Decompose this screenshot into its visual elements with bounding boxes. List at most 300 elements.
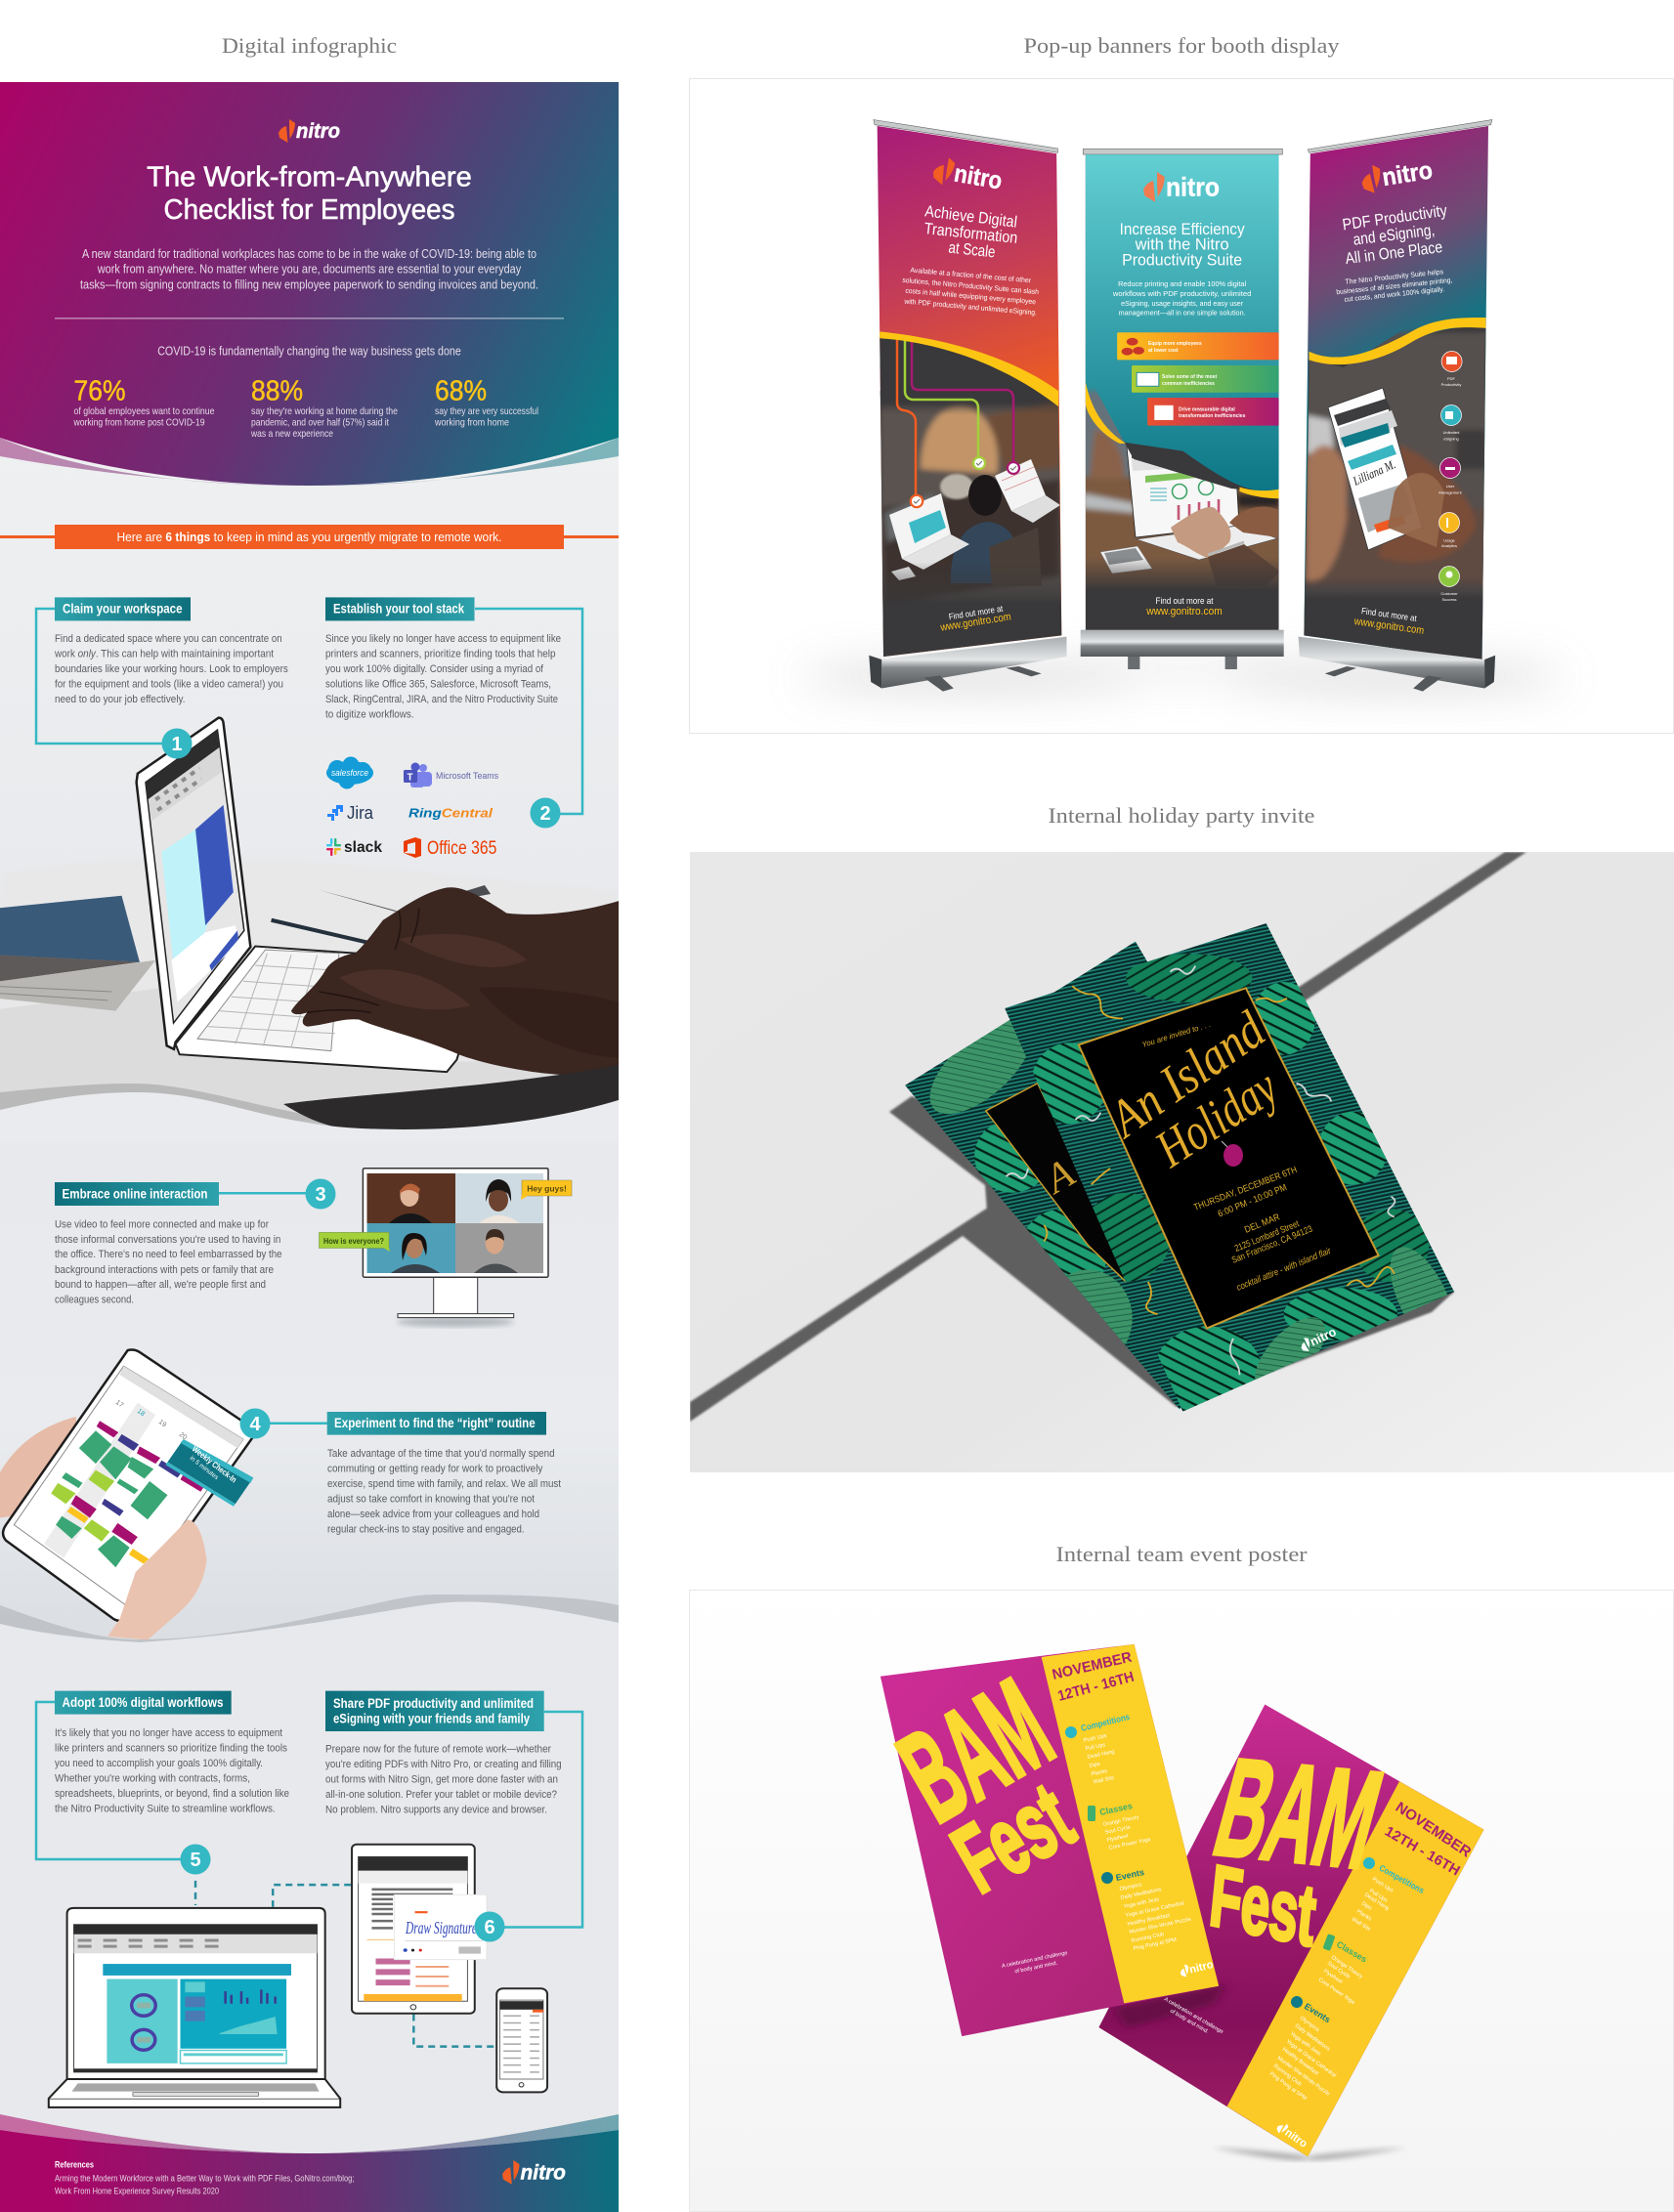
orange banner: [0, 525, 619, 549]
body: cut costs, and work 100% digitally.: [1344, 284, 1444, 304]
icon labels: PDF: [1447, 376, 1456, 381]
left banner text: [902, 155, 1039, 634]
back poster title: BAM: [1201, 1729, 1395, 1897]
body: The Nitro Productivity Suite helps: [1345, 267, 1444, 286]
title: and eSigning,: [1352, 222, 1436, 249]
body text: Prepare now for the future of remote work—whether: [325, 1743, 551, 1755]
heading: pop-up banners: Pop-up banners for booth display: [1024, 33, 1339, 58]
back poster title: Fest: [1206, 1847, 1320, 1964]
invite cards: [874, 917, 1469, 1427]
signature text: Draw Signature: [405, 1918, 477, 1937]
step 6: share pdf productivity: eSigning with your friends and family: [333, 1712, 530, 1726]
intro paragraph: tasks—from signing contracts to filling new employee paperwork to sending invoices and beyond.: [80, 276, 538, 291]
calendar day numbers: 17: [114, 1399, 124, 1409]
front poster lists: Competitions: [1080, 1712, 1131, 1733]
front poster lists: Daily Meditations: [1120, 1887, 1162, 1901]
front poster lists: Events: [1115, 1867, 1145, 1883]
body text: all-in-one solution. Prefer your tablet or mobile device?: [325, 1789, 557, 1801]
body text: like printers and scanners so prioritize finding the tools: [55, 1742, 287, 1754]
device illustrations: [49, 1845, 547, 2107]
body text: printers and scanners, prioritize finding tools that help: [325, 649, 556, 660]
body text: to digitize workflows.: [325, 709, 414, 721]
logo: nitro: [1188, 1959, 1215, 1977]
body: eSigning, usage insights, and easy user: [1121, 299, 1244, 308]
title: [147, 162, 472, 226]
stats subtitle: COVID-19 is fundamentally changing the way business gets done: [157, 344, 461, 358]
front poster lists: Push Ups: [1083, 1733, 1107, 1744]
middle banner: [1080, 149, 1285, 669]
phone: [496, 1988, 547, 2092]
event details: cocktail attire - with island flair: [1235, 1246, 1333, 1294]
body text: you work 100% digitally. Consider using a myriad of: [325, 663, 543, 675]
front poster lists: Running Club: [1131, 1932, 1165, 1944]
left banner laptops: [889, 459, 1060, 580]
icon labels: Analytics: [1441, 543, 1457, 548]
logo: nitro: nitro: [296, 120, 340, 143]
call to action: Find out more at: [1155, 596, 1214, 607]
poster category icons: [1065, 1726, 1375, 2008]
title: with the Nitro: [1135, 235, 1229, 254]
body text: Slack, RingCentral, JIRA, and the Nitro Productivity Suite: [325, 694, 558, 705]
stat: 76%: of global employees want to continue: [74, 406, 215, 417]
step 2: establish your tool stack: Establish your tool stack: [333, 602, 464, 616]
title: Checklist for Employees: [164, 194, 455, 226]
poster shapes: [880, 1644, 1483, 2156]
wave: lower section band: [0, 1595, 619, 1642]
back poster lists: Core Power Yoga: [1317, 1978, 1356, 2007]
logo: slack: [326, 838, 382, 856]
icon labels: Usage: [1443, 538, 1456, 543]
icon labels: Customer: [1440, 591, 1458, 596]
front poster lists: Dead Hang: [1087, 1749, 1115, 1761]
call to action: www.gonitro.com: [939, 611, 1012, 634]
logo: jira: Jira: [347, 803, 374, 823]
logo: nitro: [279, 119, 340, 143]
back poster lists: Yoga at Grace Cathedral: [1285, 2039, 1337, 2079]
calendar day numbers: 19: [157, 1419, 167, 1428]
stat: 76%: working from home post COVID-19: [73, 418, 205, 428]
body: [1112, 279, 1251, 317]
back poster lists: Olympics: [1299, 2016, 1320, 2033]
step 3: embrace online interaction: 3: [315, 1184, 326, 1206]
icon labels: Management: [1438, 490, 1463, 495]
front poster lists: Dips: [1089, 1762, 1101, 1769]
panel: digital infographic: [0, 82, 619, 2212]
stat: 76%: 76%: [74, 375, 125, 406]
tablet: [352, 1845, 475, 2014]
front poster lists: Ping Pong at 5PM: [1133, 1937, 1178, 1952]
hands: [291, 887, 619, 1076]
panel: pop-up banners: [690, 78, 1673, 733]
step 4: experiment to find the right routine: Experiment to find the “right” routine: [334, 1416, 536, 1430]
logo: jira: [327, 803, 374, 823]
back poster: [1098, 1704, 1483, 2156]
body text: the office. There's no need to feel embarrassed by the: [55, 1249, 282, 1260]
front poster title: Fest: [936, 1762, 1090, 1913]
stat: 88%: pandemic, and over half (57%) said it: [251, 418, 389, 428]
dashed connectors: [195, 1881, 494, 2047]
back poster lists: Dips: [1360, 1901, 1373, 1912]
logo: microsoft teams: Microsoft Teams: [436, 771, 498, 782]
badge 5: [180, 1845, 211, 1874]
feature labels: [1148, 341, 1246, 419]
body: businesses of all sizes eliminate printing,: [1336, 276, 1453, 296]
back poster lists: Planks: [1355, 1909, 1373, 1923]
phone signature: Lilliana M.: [1350, 456, 1397, 489]
front poster lists: Core Power Yoga: [1108, 1837, 1152, 1851]
stat: 68%: [435, 380, 537, 428]
middle banner laptop: [1127, 440, 1277, 560]
body text: bound to happen—after all, we're people first and: [55, 1279, 266, 1291]
body: [902, 266, 1039, 317]
hero swoosh: [0, 438, 619, 486]
logo: salesforce: salesforce: [331, 768, 368, 778]
body text: [54, 633, 288, 705]
logo: nitro: [502, 2160, 566, 2185]
body text: boundaries like your working hours. Look to employers: [55, 663, 288, 675]
wave: dark swoosh: [283, 1065, 619, 1130]
body text: [55, 1218, 282, 1306]
back poster lists: Healthy Breakfast: [1281, 2047, 1319, 2077]
title: at Scale: [948, 239, 996, 261]
body: Available at a fraction of the cost of other: [910, 266, 1032, 284]
front poster lists: Wall Sits: [1093, 1775, 1115, 1785]
script title: Holiday: [1144, 1057, 1288, 1178]
call to action: www.gonitro.com: [1352, 616, 1425, 637]
speech bubble: hey guys: [521, 1180, 572, 1200]
logo: nitro: [952, 160, 1005, 195]
signature popup: [394, 1894, 487, 1960]
back poster details: 12TH - 16TH: [1382, 1824, 1462, 1879]
intro paragraph: work from anywhere. No matter where you are, documents are essential to your everyday: [97, 262, 522, 276]
middle banner tablet: [1100, 546, 1152, 574]
front poster lists: Yoga at Grace Cathedral: [1125, 1900, 1184, 1919]
logo: salesforce: [326, 756, 373, 789]
badge 5: 5: [190, 1850, 201, 1871]
body text: for the equipment and tools (like a video camera!) you: [55, 679, 283, 691]
badge 6: 6: [484, 1917, 495, 1938]
footer swoosh: [0, 2114, 619, 2153]
panel background: [0, 438, 619, 1642]
back poster lists: Pull Ups: [1368, 1889, 1389, 1904]
badge 6: [475, 1911, 504, 1942]
body text: commuting or getting ready for work to proactively: [327, 1463, 543, 1474]
body text: [55, 1727, 289, 1814]
body text: regular check-ins to stay positive and engaged.: [327, 1524, 525, 1536]
body text: spreadsheets, blueprints, or beyond, find a solution like: [55, 1788, 289, 1800]
back poster lists: [1163, 1863, 1426, 2150]
feature labels: common inefficiencies: [1162, 381, 1215, 387]
calendar events: [51, 1421, 204, 1567]
front poster lists: Flywheel: [1106, 1833, 1129, 1844]
back poster lists: Yoga with Jess: [1289, 2031, 1322, 2058]
left banner: [869, 120, 1066, 692]
front poster lists: Olympics: [1119, 1882, 1142, 1893]
back poster lists: Events: [1303, 2001, 1332, 2024]
body: solutions, the Nitro Productivity Suite can slash: [902, 276, 1039, 296]
body text: out forms with Nitro Sign, get more done faster with an: [325, 1774, 558, 1786]
video tiles: [367, 1173, 543, 1273]
body: with PDF productivity and unlimited eSigning.: [903, 297, 1037, 317]
section background: [0, 1092, 619, 1131]
back poster lists: Ping Pong at 5PM: [1268, 2071, 1308, 2102]
logo: nitro: [1166, 172, 1220, 201]
popup panel: [165, 1439, 253, 1507]
body text: you need to accomplish your goals 100% digitally.: [55, 1758, 263, 1769]
stat: 88%: [250, 375, 398, 440]
body: workflows with PDF productivity, unlimited: [1112, 289, 1251, 298]
left banner photo: [875, 339, 1065, 659]
front poster lists: of body and mind.: [1014, 1961, 1058, 1975]
body text: No problem. Nitro supports any device and browser.: [325, 1804, 547, 1815]
front poster lists: Murder-She-Wrote Puzzle: [1129, 1917, 1192, 1936]
back poster lists: Dead Hang: [1363, 1893, 1390, 1912]
script fragment on back card: A: [1035, 1151, 1083, 1204]
body text: work only. This can help with maintaining important: [54, 649, 274, 660]
body: management—all in one simple solution.: [1119, 309, 1246, 317]
front poster shadow: [1113, 1984, 1227, 2028]
front poster details: [1051, 1649, 1136, 1705]
back poster lists: Daily Meditations: [1294, 2023, 1331, 2053]
front poster lists: Soul Cycle: [1104, 1825, 1132, 1836]
icon labels: Success: [1441, 597, 1457, 602]
body text: the Nitro Productivity Suite to streamline workflows.: [55, 1803, 276, 1814]
icon labels: eSigning: [1443, 437, 1459, 442]
feature labels: transformation inefficiencies: [1179, 413, 1246, 419]
front poster lists: A celebration and challenge: [1002, 1950, 1068, 1970]
back poster lists: Wall Sits: [1351, 1917, 1372, 1933]
title: Increase Efficiency: [1120, 220, 1245, 238]
logo: ringcentral: Ring Central: [408, 805, 493, 820]
back poster lists: Murder-She-Wrote Puzzle: [1276, 2056, 1331, 2098]
front poster lists: [1002, 1712, 1215, 1978]
ornament: [1222, 1141, 1243, 1167]
step 5: adopt 100% digital workflows: Adopt 100% digital workflows: [63, 1695, 223, 1710]
title: [1120, 220, 1245, 270]
back poster title: [1201, 1729, 1395, 1964]
logo: microsoft teams: T: [407, 772, 413, 784]
title: Transformation: [923, 220, 1018, 247]
right hand and pen: [107, 1519, 206, 1640]
logo: nitro: [1308, 1324, 1339, 1349]
right banner: [1299, 120, 1495, 692]
tablet with calendar held in hands: [0, 1350, 254, 1640]
heading: digital infographic: Digital infographic: [222, 33, 397, 58]
feature labels: Drive measurable digital: [1179, 406, 1235, 412]
panel: team event poster: [690, 1591, 1673, 2212]
speech bubble: how is everyone: How is everyone?: [323, 1236, 384, 1246]
body: [1336, 267, 1453, 304]
step 3: embrace online interaction: Embrace online interaction: [63, 1186, 207, 1202]
stat: 88%: say they're working at home during the: [251, 406, 398, 417]
panel: holiday party invite: [690, 852, 1674, 1472]
pencil: [272, 920, 369, 943]
middle banner photo: [1080, 391, 1285, 636]
speech bubble: hey guys: Hey guys!: [527, 1184, 567, 1194]
footer: [0, 2130, 619, 2212]
feature labels: at lower cost: [1148, 348, 1179, 354]
icon labels: Productivity: [1441, 382, 1461, 387]
body text: [325, 633, 561, 721]
step 6: share pdf productivity: [325, 1691, 582, 1927]
stat: 68%: working from home: [434, 418, 509, 428]
intro paragraph: A new standard for traditional workplaces has come to be in the wake of COVID-19: being able to: [82, 246, 537, 261]
intro paragraph: [80, 246, 538, 291]
popup text: Weekly Check-In: [191, 1444, 238, 1484]
popup text: [189, 1444, 238, 1484]
back poster details: [1382, 1799, 1474, 1879]
call to action: Find out more at: [948, 604, 1004, 621]
body: Reduce printing and enable 100% digital: [1118, 279, 1246, 288]
title: [1342, 202, 1449, 268]
feature labels: Equip more employees: [1148, 341, 1202, 347]
photo: desk with hands typing on laptop: [0, 718, 619, 1121]
body text: colleagues second.: [55, 1295, 134, 1306]
icon labels: User: [1446, 484, 1455, 489]
logo: office 365: Office 365: [427, 838, 496, 859]
front poster title: [878, 1652, 1090, 1913]
heading: holiday party invite: Internal holiday party invite: [1048, 803, 1315, 828]
stat: 76%: [74, 380, 215, 428]
body: costs in half while equipping every employee: [905, 286, 1036, 306]
shadow strips: [690, 852, 1526, 1422]
back poster lists: Competitions: [1378, 1863, 1426, 1895]
logo: [1143, 172, 1220, 202]
front poster lists: Planks: [1091, 1768, 1108, 1777]
references: [55, 2160, 354, 2196]
left banner connector lines: [897, 339, 1013, 495]
middle banner text: [1112, 172, 1251, 617]
event details: San Francisco, CA 94123: [1230, 1224, 1314, 1266]
laptop: [49, 1908, 340, 2107]
popup text: in 5 minutes: [189, 1455, 220, 1482]
logo: nitro: [1282, 2127, 1309, 2150]
monitor with video call: [319, 1169, 572, 1327]
invite text: You are invited to . . .: [1141, 1020, 1212, 1049]
back poster lists: of body and mind.: [1169, 2009, 1210, 2035]
call to action: www.gonitro.com: [1145, 606, 1223, 617]
stat: 68%: 68%: [435, 375, 487, 406]
body text: need to do your job effectively.: [55, 694, 186, 705]
event details: [1192, 1165, 1333, 1294]
feature labels: Solve some of the most: [1162, 374, 1217, 380]
body text: Take advantage of the time that you'd normally spend: [327, 1448, 555, 1460]
event details: DEL MAR: [1243, 1212, 1281, 1236]
invite text: [1035, 1000, 1339, 1353]
step 4: experiment to find the right routine: 4: [249, 1414, 261, 1435]
step 5: adopt 100% digital workflows: [36, 1691, 289, 1859]
stat: 88%: 88%: [251, 375, 303, 406]
laptop base and keyboard: [176, 947, 485, 1072]
step 3: embrace online interaction: [55, 1178, 336, 1306]
body text: [327, 1448, 561, 1536]
step 1: claim your workspace: [36, 597, 288, 758]
laptop lid: [137, 718, 250, 1049]
script title: An Island: [1096, 1000, 1275, 1149]
body text: those informal conversations you're used to having in: [55, 1234, 280, 1246]
back poster lists: Running Club: [1272, 2063, 1303, 2088]
right banner phone: [1328, 388, 1422, 550]
logo: slack: slack: [344, 839, 382, 856]
step 2: establish your tool stack: [325, 597, 582, 829]
front poster lists: Orange Theory: [1102, 1814, 1139, 1828]
body text: Use video to feel more connected and make up for: [55, 1218, 269, 1230]
step 1: claim your workspace: 1: [171, 734, 183, 755]
calendar day numbers: [114, 1399, 188, 1441]
call to action: [1145, 596, 1223, 617]
body text: [325, 1743, 562, 1815]
event details: THURSDAY, DECEMBER 6TH: [1192, 1165, 1299, 1213]
back card: [874, 921, 1347, 1427]
logo: [1179, 1958, 1215, 1978]
call to action: [1352, 606, 1425, 637]
body text: Since you likely no longer have access to equipment like: [325, 633, 561, 645]
back poster lists: Flywheel: [1322, 1969, 1344, 1985]
references: Arming the Modern Workforce with a Better Way to Work with PDF Files, GoNitro.com/blog;: [55, 2173, 354, 2183]
front poster lists: Healthy Breakfast: [1127, 1913, 1171, 1928]
logo: office 365: [404, 837, 496, 859]
stat: 68%: say they are very successful: [435, 406, 538, 417]
body text: background interactions with pets or family that are: [55, 1264, 274, 1276]
logo: [1274, 2120, 1309, 2150]
front poster lists: Classes: [1098, 1801, 1134, 1817]
logo: [931, 155, 1005, 195]
logo: [1298, 1324, 1339, 1353]
stat: 88%: was a new experience: [250, 429, 333, 440]
front poster title: BAM: [878, 1652, 1074, 1850]
title: The Work-from-Anywhere: [147, 162, 472, 193]
middle banner hands: [1171, 506, 1280, 586]
title: All in One Place: [1345, 238, 1443, 268]
front card: [987, 917, 1469, 1420]
step 4: experiment to find the right routine: [240, 1409, 561, 1536]
calendar day numbers: 20: [178, 1431, 188, 1441]
right banner feature icons: [1438, 352, 1462, 586]
floor shadows: [801, 661, 1564, 689]
step 6: share pdf productivity: Share PDF productivity and unlimited: [333, 1696, 534, 1711]
logo: microsoft teams: [404, 762, 498, 787]
body text: solutions like Office 365, Salesforce, Microsoft Teams,: [325, 679, 551, 691]
hero header: [0, 82, 619, 486]
confetti ribbons: [1006, 966, 1395, 1375]
heading: team event poster: Internal team event poster: [1055, 1542, 1308, 1566]
back poster lists: Push Ups: [1371, 1877, 1395, 1894]
logo: [1359, 156, 1435, 194]
event details: 2125 Lombard Street: [1233, 1218, 1301, 1255]
title: PDF Productivity: [1342, 202, 1449, 234]
call to action: Find out more at: [1360, 606, 1418, 623]
body text: It's likely that you no longer have access to equipment: [55, 1727, 282, 1739]
floor shadow: [1212, 2148, 1407, 2160]
body text: adjust so take comfort in knowing that you're not: [327, 1493, 535, 1505]
speech bubble: how is everyone: [319, 1232, 390, 1252]
back poster lists: Orange Theory: [1330, 1955, 1364, 1980]
back poster lists: A celebration and challenge: [1163, 1997, 1224, 2035]
back poster lists: Classes: [1335, 1939, 1368, 1964]
logo: nitro: [1380, 156, 1435, 191]
back poster lists: Soul Cycle: [1326, 1961, 1351, 1980]
body text: exercise, spend time with family, and relax. We all must: [327, 1478, 561, 1490]
right banner photo: [1300, 332, 1490, 640]
front poster lists: Pull Ups: [1085, 1742, 1106, 1752]
books: [0, 896, 155, 1011]
front poster details: 12TH - 16TH: [1056, 1669, 1136, 1705]
banner shapes: [869, 120, 1495, 692]
title: [923, 202, 1018, 261]
body text: Find a dedicated space where you can concentrate on: [55, 633, 282, 645]
front poster details: NOVEMBER: [1051, 1649, 1134, 1683]
body text: you're editing PDFs with Nitro Pro, or creating and filling: [325, 1759, 562, 1770]
